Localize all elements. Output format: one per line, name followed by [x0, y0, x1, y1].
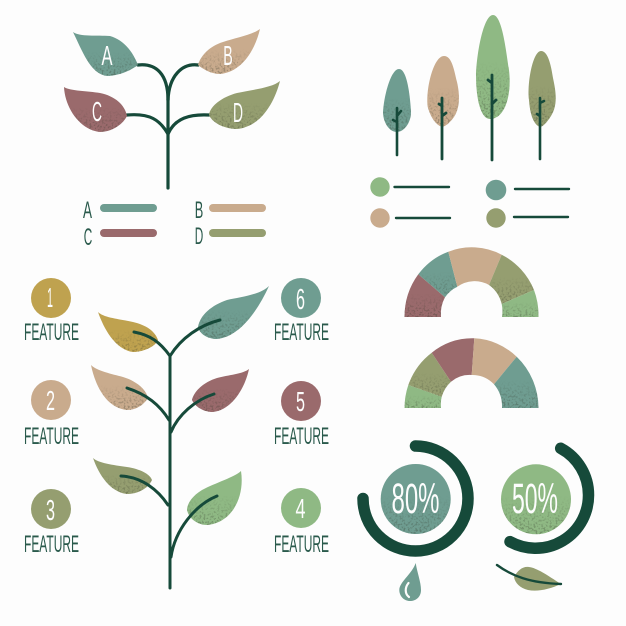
tree 2 [427, 56, 459, 159]
progress ring: 80% [363, 446, 468, 551]
icon: water drop [399, 563, 421, 601]
progress ring: 80%: 80% [392, 475, 440, 523]
leaf B: B [223, 40, 233, 71]
feature 2 [24, 380, 79, 450]
icon: leaf [497, 565, 561, 591]
panel: top plant with leaves A to D [64, 29, 280, 251]
tree 4 [529, 51, 556, 159]
feature 4: 4 [296, 493, 306, 524]
feature plant stems [121, 320, 220, 588]
plant stems [127, 65, 209, 188]
leaf A: A [102, 40, 113, 71]
progress ring: 50% [501, 448, 589, 548]
progress ring: 50%: 50% [512, 475, 558, 523]
leaf C [64, 87, 127, 132]
leaf 3 olive [93, 458, 152, 494]
leaf C: C [92, 96, 102, 127]
feature 5 [274, 381, 329, 450]
feature 5: 5 [296, 386, 305, 417]
legend A to D: D [195, 223, 203, 250]
legend A to D: A [83, 197, 92, 224]
leaf B [198, 29, 260, 74]
feature 1 [24, 278, 79, 346]
leaf 1 yellow [98, 312, 158, 352]
tree 1 [383, 69, 411, 155]
panel: feature plant: FEATURE [24, 319, 79, 346]
feature 3 [24, 489, 79, 558]
leaf 4 green [187, 471, 242, 525]
text: FEATURE [274, 531, 329, 558]
leaf D [209, 81, 280, 129]
feature 6: 6 [296, 284, 305, 316]
text: FEATURE [274, 423, 329, 450]
tree 3 [476, 15, 510, 160]
tree legend [370, 177, 569, 228]
feature 3: 3 [46, 495, 55, 527]
leaf D: D [233, 97, 243, 128]
leaf A [73, 32, 138, 76]
feature 2: 2 [46, 385, 55, 416]
legend A to D: B [195, 197, 203, 224]
legend A to D: C [84, 224, 92, 251]
leaf 6 teal [198, 286, 269, 339]
chart: lower semicircle [404, 338, 538, 408]
panel: four trees with legend [370, 15, 569, 228]
panel: feature plant: FEATURE [24, 423, 79, 450]
feature 1: 1 [47, 282, 53, 313]
legend A to D [83, 197, 266, 251]
feature 6 [274, 278, 329, 346]
leaf 2 tan [91, 365, 148, 410]
panel: feature plant: FEATURE [24, 531, 79, 558]
leaf 5 maroon [192, 369, 249, 412]
feature 4 [274, 488, 329, 558]
chart: upper semicircle [404, 247, 539, 317]
text: FEATURE [274, 319, 329, 346]
panel: feature plant [24, 278, 329, 588]
